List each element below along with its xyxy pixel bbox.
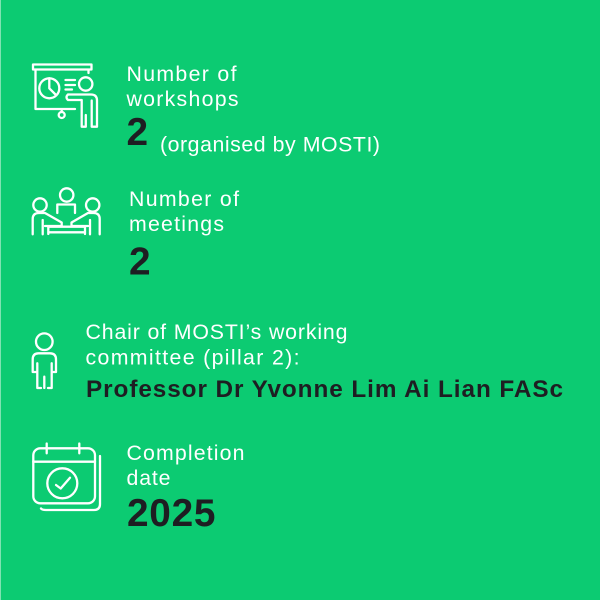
text: chair name: Professor Dr Yvonne Lim Ai Lian FASc — [86, 376, 563, 403]
text: completion date label: Completion — [126, 441, 244, 465]
text: chair label — [86, 320, 348, 370]
text: number of workshops label: workshops — [126, 87, 238, 111]
text: completion date label: date — [126, 466, 170, 490]
text: completion date label — [126, 441, 244, 490]
panel: meetings — [33, 187, 239, 284]
text: number of workshops label: Number of — [126, 62, 237, 86]
text: number of workshops label — [126, 62, 238, 111]
icon: calendar with check — [33, 444, 100, 510]
number: completion year: 2025 — [127, 492, 216, 535]
icon: presenter at board — [33, 64, 97, 127]
icon: three people at table — [33, 188, 100, 234]
panel: chair — [33, 320, 563, 403]
text: number of meetings label: Number of — [129, 187, 239, 211]
text: chair label: committee (pillar 2): — [86, 346, 300, 370]
panel: completion date — [33, 441, 244, 535]
number: meetings value: 2 — [129, 240, 151, 284]
panel: workshops — [33, 62, 380, 156]
text: organised by MOSTI: (organised by MOSTI) — [160, 132, 380, 156]
text: chair label: Chair of MOSTI’s working — [86, 320, 348, 344]
number: workshops value: 2 — [126, 111, 148, 154]
text: number of meetings label — [129, 187, 239, 236]
text: number of meetings label: meetings — [129, 212, 224, 236]
icon: person — [33, 333, 56, 388]
